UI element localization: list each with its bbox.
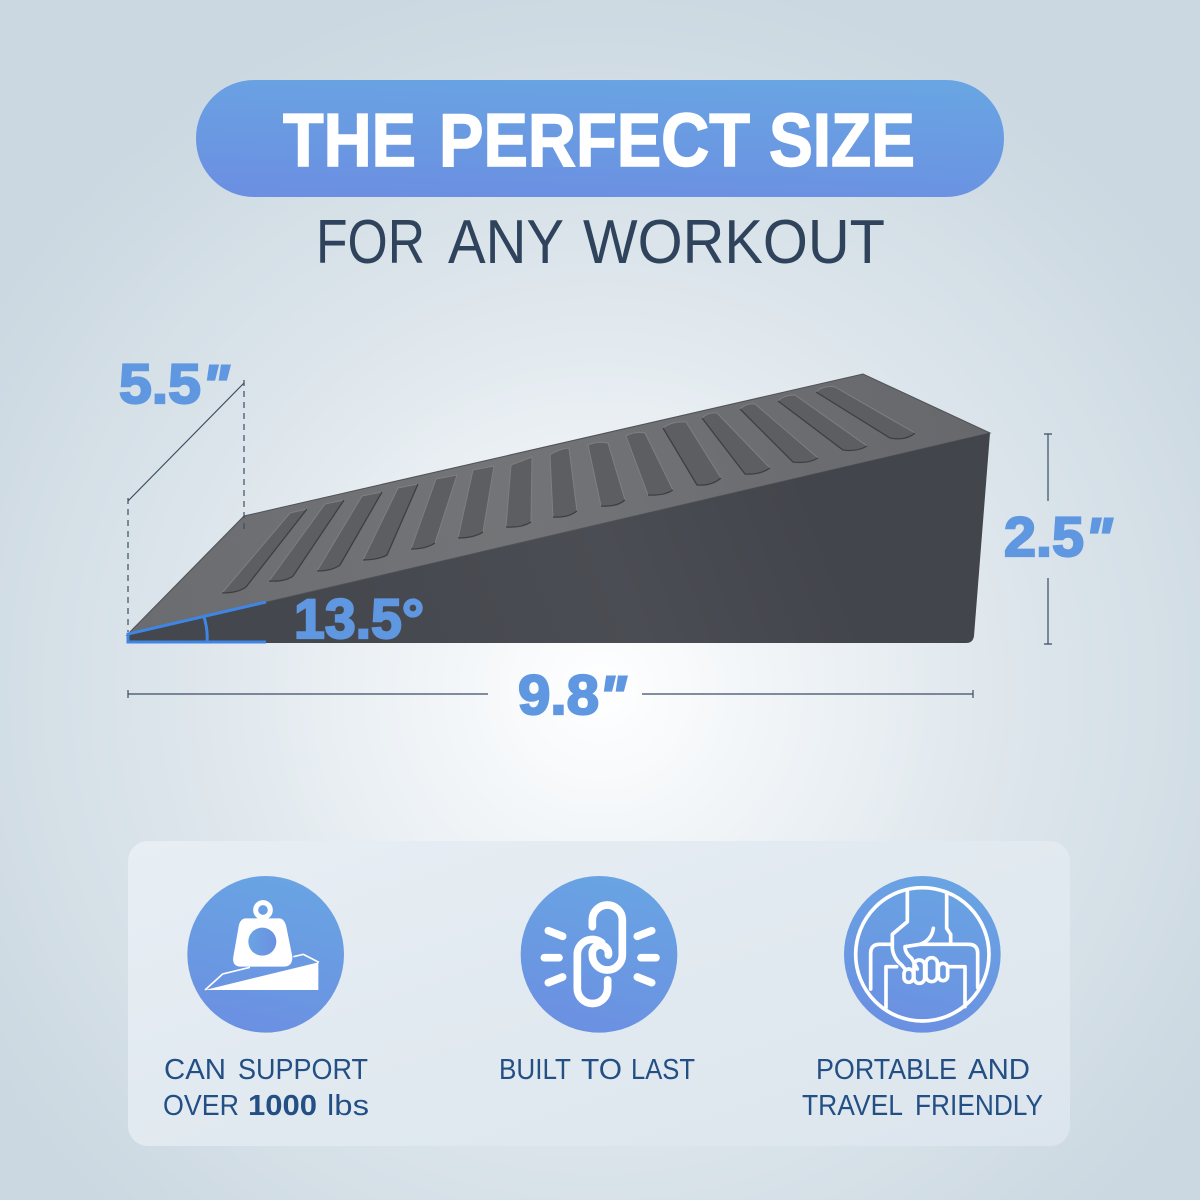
title: the perfect size: PERFECT bbox=[439, 98, 750, 182]
label: travel friendly: FRIENDLY bbox=[915, 1090, 1043, 1122]
rib shadow edges bbox=[222, 392, 915, 593]
wedge ribs bbox=[222, 387, 915, 593]
height label: " bbox=[1085, 506, 1113, 569]
subtitle: ANY bbox=[448, 208, 564, 277]
label: built to last: TO bbox=[581, 1054, 622, 1086]
dimension: length 9.8 inches bbox=[128, 663, 973, 727]
label: travel friendly bbox=[802, 1090, 1043, 1122]
depth label: 5.5 bbox=[119, 352, 201, 415]
dimension: depth 5.5 inches bbox=[119, 352, 244, 632]
label: portable and: AND bbox=[968, 1054, 1030, 1086]
length label: 9.8 bbox=[518, 663, 599, 726]
panel: features bbox=[128, 841, 1070, 1146]
label: built to last: LAST bbox=[631, 1054, 695, 1086]
title: the perfect size: SIZE bbox=[769, 98, 915, 182]
length lines bbox=[128, 690, 973, 698]
angle marker bbox=[128, 602, 266, 642]
wedge side face bbox=[127, 433, 990, 643]
label: can support: CAN bbox=[164, 1054, 226, 1086]
height lines bbox=[1044, 434, 1052, 644]
feature: weight support bbox=[163, 876, 369, 1122]
icon: chain link bbox=[521, 876, 677, 1033]
subtitle bbox=[316, 208, 885, 277]
length label: " bbox=[599, 664, 627, 727]
depth label: " bbox=[202, 353, 230, 416]
subtitle: WORKOUT bbox=[583, 208, 885, 277]
subtitle: FOR bbox=[316, 208, 425, 277]
depth label bbox=[119, 352, 230, 416]
title: the perfect size bbox=[283, 98, 915, 182]
label: over 1000 lbs: lbs bbox=[327, 1090, 369, 1122]
dimension: height 2.5 inches bbox=[1004, 434, 1113, 644]
feature: built to last bbox=[499, 876, 695, 1086]
label: over 1000 lbs: 1000 bbox=[248, 1090, 317, 1122]
angle label: 13.5° bbox=[294, 587, 424, 650]
icon: hand carrying wedge bbox=[844, 876, 1001, 1033]
wedge top face bbox=[127, 374, 990, 635]
label: built to last bbox=[499, 1054, 695, 1086]
feature: portable bbox=[802, 876, 1043, 1122]
label: over 1000 lbs: OVER bbox=[163, 1090, 239, 1122]
title pill bbox=[196, 80, 1004, 197]
dimension: angle 13.5 degrees bbox=[128, 587, 424, 650]
label: portable and: PORTABLE bbox=[816, 1054, 957, 1086]
title: the perfect size: THE bbox=[283, 98, 416, 182]
icon: weight on wedge bbox=[187, 876, 344, 1033]
label: can support: SUPPORT bbox=[238, 1054, 368, 1086]
depth lines bbox=[128, 380, 244, 632]
label: can support bbox=[164, 1054, 368, 1086]
wedge product bbox=[127, 374, 990, 643]
label: travel friendly: TRAVEL bbox=[802, 1090, 903, 1122]
label: built to last: BUILT bbox=[499, 1054, 571, 1086]
label: over 1000 lbs bbox=[163, 1090, 369, 1122]
height label: 2.5 bbox=[1004, 505, 1084, 568]
